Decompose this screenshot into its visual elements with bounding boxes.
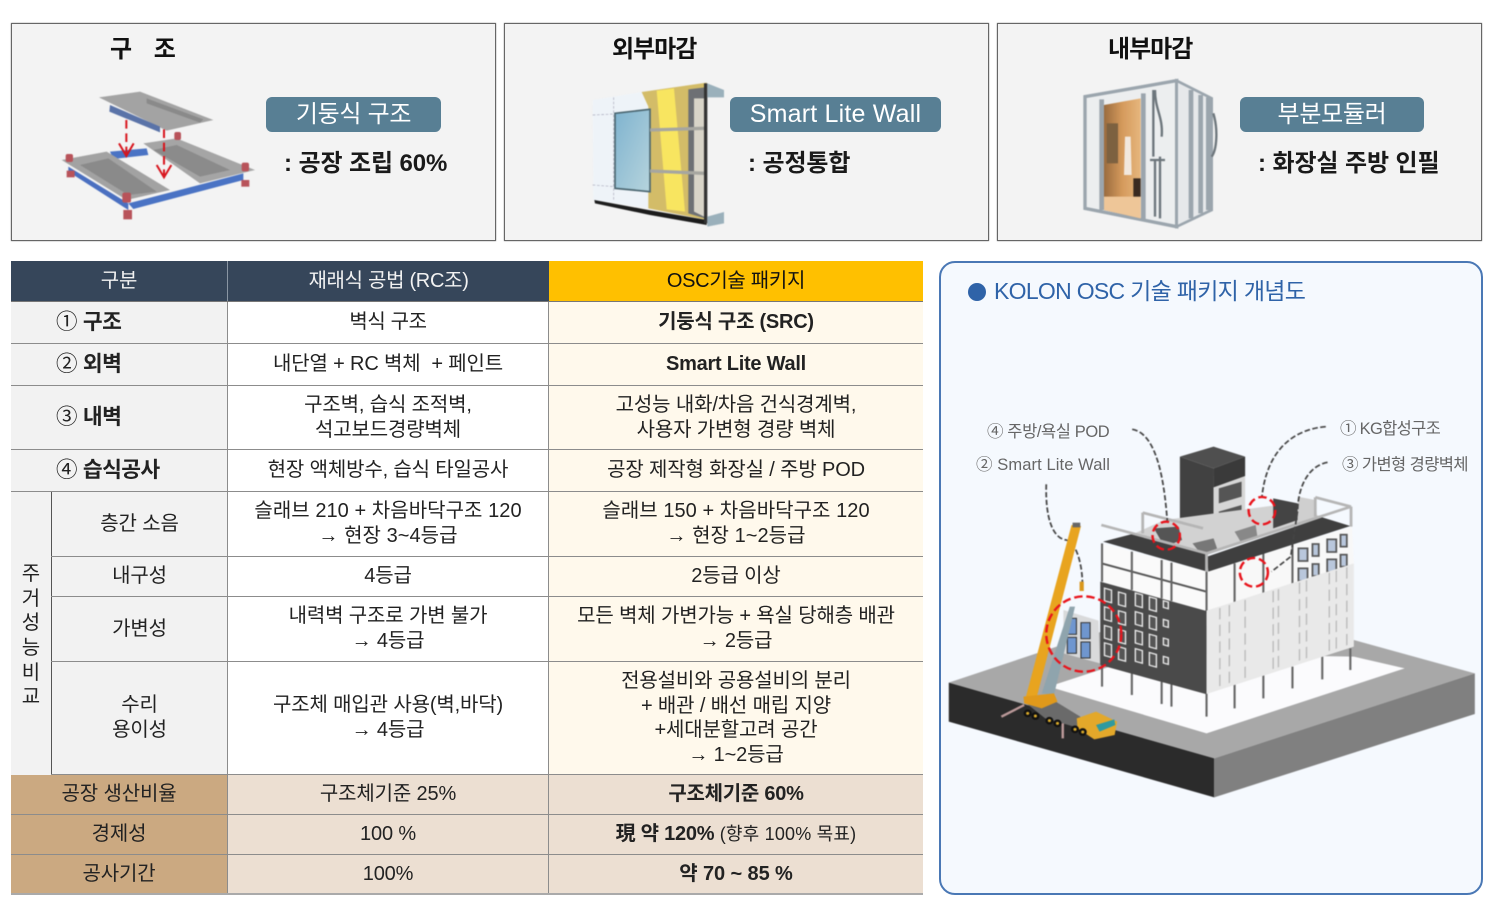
side label: housing performance comparison: 성 [22, 612, 40, 634]
core tower [1180, 447, 1245, 533]
roof floor with dark slab and railing [1101, 497, 1351, 572]
row: interior wall: 고성능 내화/차음 건식경계벽, [616, 394, 856, 416]
row: floor noise: → 현장 3~4등급 [318, 525, 458, 547]
row: factory production ratio [11, 775, 923, 815]
label: kitchen and bath pod: ④ 주방/욕실 POD [987, 423, 1109, 441]
panel: exterior finish [504, 23, 989, 241]
crane [1001, 523, 1117, 739]
leader lines [1046, 427, 1328, 590]
row: flexibility: 내력벽 구조로 가변 불가 [289, 605, 487, 627]
row: flexibility: 가변성 [112, 618, 167, 640]
table header: 재래식 공법 (RC조) [308, 270, 469, 292]
row: repairability: 전용설비와 공용설비의 분리 [621, 670, 851, 692]
light right facade [1207, 563, 1354, 694]
row: factory production ratio: 구조체기준 60% [668, 783, 804, 805]
side label: housing performance comparison: 주 [22, 563, 40, 585]
row: wet work: 공장 제작형 화장실 / 주방 POD [607, 459, 865, 481]
badge: partial modular: 부분모듈러 [1278, 101, 1386, 128]
row: repairability: +세대분할고려 공간 [655, 719, 817, 741]
row: repairability: → 4등급 [352, 719, 424, 741]
table header: 구분 [101, 270, 137, 292]
badge: Smart Lite Wall [730, 97, 941, 132]
label: Smart Lite Wall: ② Smart Lite Wall [976, 456, 1110, 474]
upper open floors [1101, 527, 1354, 613]
site base [949, 620, 1475, 797]
text: bath and kitchen infill: : 화장실 주방 인필 [1258, 150, 1439, 177]
row: repairability: → 1~2등급 [688, 744, 784, 766]
diagram: isometric building with crane [948, 425, 1476, 798]
side label: housing performance comparison: 거 [22, 588, 40, 610]
row: durability: 내구성 [112, 565, 167, 587]
row: structure [11, 302, 923, 344]
comparison table [11, 261, 923, 895]
row: repairability: 용이성 [112, 719, 167, 741]
red dashed highlight circles [1046, 497, 1275, 672]
row: factory production ratio: 구조체기준 25% [320, 783, 456, 805]
row: floor noise: 층간 소음 [100, 512, 179, 534]
dark left facade [1100, 582, 1207, 694]
row: wet work [11, 450, 923, 492]
row: interior wall: 석고보드경량벽체 [315, 418, 461, 440]
badge: partial modular [1240, 97, 1424, 132]
row: flexibility: → 4등급 [352, 630, 424, 652]
panel: concept diagram [939, 261, 1483, 895]
row: exterior wall [11, 344, 923, 386]
row: interior wall [11, 386, 923, 450]
row: exterior wall: ② 외벽 [56, 346, 121, 378]
table header: OSC기술 패키지 [667, 270, 805, 292]
row: construction period: 100% [363, 862, 413, 884]
row: wet work: ④ 습식공사 [56, 452, 160, 484]
row: interior wall: 사용자 가변형 경량 벽체 [637, 418, 835, 440]
row: factory production ratio: 공장 생산비율 [62, 783, 176, 805]
row: durability: 2등급 이상 [691, 565, 781, 587]
row: floor noise [51, 492, 923, 557]
icon: wall section [592, 82, 724, 227]
row: exterior wall: 내단열 + RC 벽체 + 페인트 [273, 353, 503, 375]
row: construction period [11, 855, 923, 895]
row: durability: 4등급 [364, 565, 412, 587]
heading: interior finish: 내부마감 [1108, 36, 1192, 63]
heading: concept diagram: KOLON OSC 기술 패키지 개념도 [994, 278, 1305, 304]
icon: bathroom pod [1082, 78, 1218, 230]
label: KG composite structure: ① KG합성구조 [1340, 420, 1440, 438]
badge: column structure [266, 97, 441, 132]
row: economy: 100 % [360, 823, 416, 845]
row: repairability: 구조체 매입관 사용(벽,바닥) [273, 694, 503, 716]
row: flexibility: → 2등급 [700, 630, 772, 652]
row: floor noise: 슬래브 150 + 차음바닥구조 120 [602, 500, 870, 522]
table header [11, 261, 923, 302]
label: flexible lightweight wall: ③ 가변형 경량벽체 [1342, 456, 1468, 474]
panel: structure [11, 23, 496, 241]
row: floor noise: → 현장 1~2등급 [666, 525, 806, 547]
panel: interior finish [997, 23, 1482, 241]
precast wall panel [1063, 610, 1100, 663]
row: flexibility: 모든 벽체 가변가능 + 욕실 당해층 배관 [577, 605, 895, 627]
row: structure: 기둥식 구조 (SRC) [658, 311, 814, 333]
side label: housing performance comparison: 교 [22, 686, 40, 708]
text: factory assembly: : 공장 조립 60% [284, 150, 447, 177]
badge: column structure: 기둥식 구조 [296, 101, 411, 128]
row: exterior wall: Smart Lite Wall [666, 353, 806, 375]
text: process integration: : 공정통합 [748, 150, 850, 177]
side label: housing performance comparison: 능 [22, 637, 40, 659]
row: repairability [51, 662, 923, 775]
row: economy: 경제성 [92, 823, 146, 845]
heading: structure: 구 조 [110, 36, 175, 63]
upper right windows [1298, 535, 1347, 581]
row: construction period: 약 70 ~ 85 % [679, 862, 793, 884]
side label: housing performance comparison: 비 [22, 662, 40, 684]
row: repairability: 수리 [121, 694, 158, 716]
row: structure: 벽식 구조 [349, 311, 427, 333]
row: structure: ① 구조 [56, 304, 121, 336]
building columns [1102, 648, 1350, 717]
row: wet work: 현장 액체방수, 습식 타일공사 [268, 459, 508, 481]
row: flexibility [51, 597, 923, 662]
icon: steel structure assembly [62, 91, 255, 220]
row: floor noise: 슬래브 210 + 차음바닥구조 120 [254, 500, 522, 522]
row: interior wall: ③ 내벽 [56, 400, 121, 430]
heading: exterior finish: 외부마감 [612, 36, 696, 63]
badge: Smart Lite Wall: Smart Lite Wall [750, 100, 921, 128]
side label: housing performance comparison [11, 492, 51, 775]
row: repairability: + 배관 / 배선 매립 지양 [641, 694, 831, 716]
row: economy [11, 815, 923, 855]
row: construction period: 공사기간 [82, 862, 156, 884]
row: durability [51, 557, 923, 597]
row: economy: 現 약 120% (향후 100% 목표) [616, 823, 856, 845]
row: interior wall: 구조벽, 습식 조적벽, [304, 394, 472, 416]
